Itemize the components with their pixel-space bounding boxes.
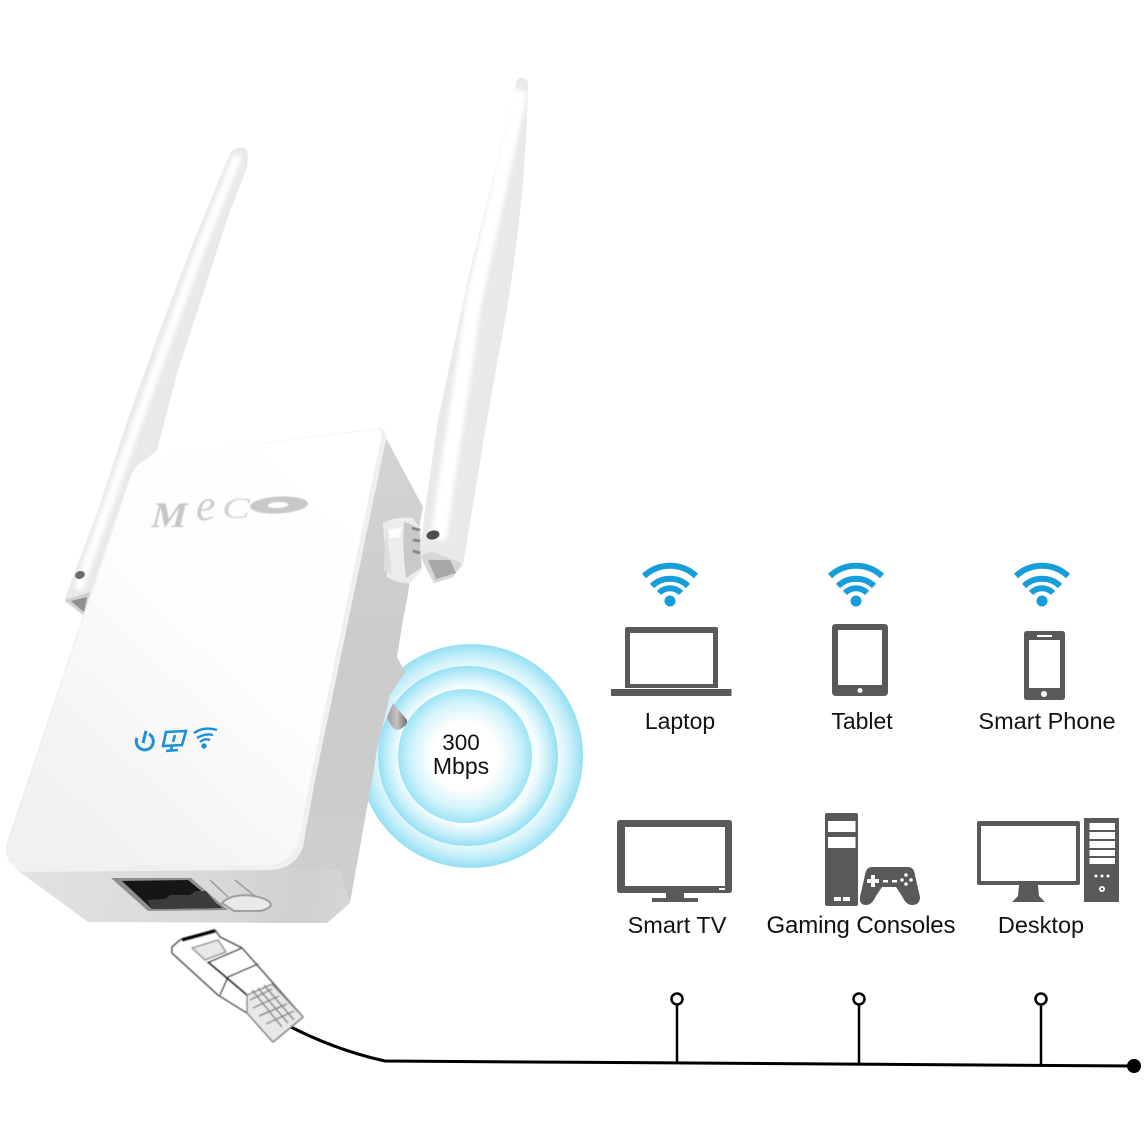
- brand logo: C: [222, 491, 251, 525]
- status LED icons: [136, 729, 217, 751]
- label: Tablet: [831, 708, 893, 734]
- left antenna: [65, 148, 248, 617]
- label: Laptop: [645, 708, 715, 734]
- line end dot: [1127, 1059, 1141, 1073]
- right antenna: [420, 78, 528, 583]
- speed label: 300: [442, 730, 480, 755]
- branch: node 1: [672, 994, 682, 1064]
- brand logo: e: [196, 481, 216, 530]
- icon: wifi: [830, 566, 882, 606]
- ethernet port: [111, 878, 228, 911]
- device: desktop: [977, 818, 1119, 938]
- icon: monitor: [977, 821, 1080, 902]
- speed label: [433, 730, 489, 779]
- branch: node 3: [1036, 994, 1046, 1066]
- brand logo: [148, 481, 308, 535]
- device: smart TV: [617, 820, 732, 938]
- antenna hinge: [383, 518, 422, 583]
- reset button: [210, 880, 271, 911]
- device: laptop: [611, 566, 732, 734]
- icon: laptop: [611, 627, 732, 696]
- icon: wifi: [644, 566, 696, 606]
- speed label: Mbps: [433, 753, 489, 779]
- icon: network: [163, 731, 186, 751]
- device: tablet: [830, 566, 893, 734]
- icon: power: [136, 731, 153, 750]
- device: smart phone: [978, 566, 1116, 734]
- label: Gaming Consoles: [766, 912, 956, 939]
- brand logo: o: [256, 489, 298, 517]
- icon: wifi: [194, 729, 217, 748]
- brand logo: M: [148, 495, 192, 535]
- label: Smart Phone: [978, 708, 1116, 734]
- icon: computer tower: [1084, 818, 1119, 902]
- icon: TV: [617, 820, 732, 902]
- speed rings: 300 Mbps: [359, 644, 583, 868]
- branch: node 2: [854, 994, 864, 1065]
- rear stud: [387, 703, 407, 730]
- router bottom panel: [8, 860, 350, 923]
- icon: phone: [1024, 631, 1065, 700]
- router right side panel: [262, 427, 423, 923]
- cable and connection line: [287, 994, 1141, 1073]
- device: gaming consoles: [766, 813, 956, 939]
- router device: [6, 78, 528, 923]
- ethernet plug: [172, 930, 303, 1042]
- icon: game controller: [860, 867, 920, 905]
- router front shell: [6, 428, 386, 872]
- icon: console tower: [825, 813, 858, 906]
- icon: wifi: [1016, 566, 1068, 606]
- icon: tablet: [832, 624, 888, 696]
- label: Smart TV: [628, 912, 727, 938]
- router front face: [8, 429, 382, 866]
- label: Desktop: [998, 912, 1084, 938]
